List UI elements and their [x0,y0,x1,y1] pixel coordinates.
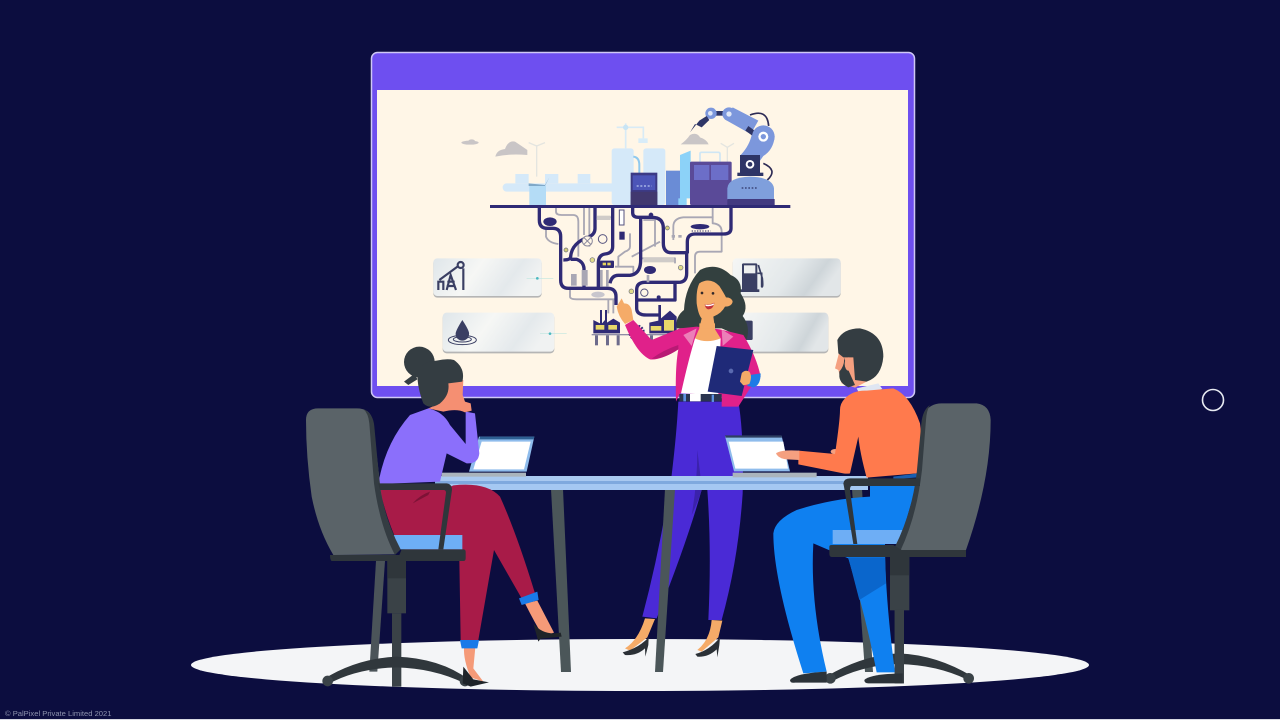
right laptop [725,435,817,477]
floor ellipse [191,639,1089,691]
dark machine [631,173,657,205]
chair seat [829,545,966,557]
eyes and mouth [701,292,714,309]
icon: barrel [740,321,753,340]
man on right with chair [773,328,991,684]
ear [845,357,853,371]
chair cushion [393,535,462,549]
jacket [625,320,761,407]
hand on tablet [740,371,751,385]
beard [839,357,855,387]
blue towers [666,171,680,205]
trouser fold [692,450,702,515]
trouser fold [413,492,430,503]
icon: oil pump [438,262,464,290]
chair column front [895,610,904,683]
trousers [642,402,743,620]
presentation screen [372,52,914,398]
second hand [831,449,839,454]
purple machine [700,152,720,162]
hair [837,328,883,382]
pointing hand [617,298,633,324]
trousers [773,485,917,673]
icon: oil drop [448,320,476,345]
belt [679,394,722,402]
screen content area [377,90,908,386]
chair back [306,408,398,555]
blue cuff [747,373,761,387]
conveyor [503,174,633,192]
trousers [380,485,535,640]
cursor circle [1202,390,1224,410]
sweater [798,388,921,478]
factory diagram [433,107,841,353]
info card: fuel pump [733,258,841,298]
box on conveyor [529,177,549,186]
lapels [683,328,697,346]
clouds [461,134,709,157]
armrest [378,483,452,549]
cuffs [460,592,539,648]
info card: oil pump [433,258,553,298]
icon: fuel pump [739,263,763,292]
shoes [790,672,903,683]
factories [592,305,678,345]
chair back leg and column [322,561,470,687]
presenter upper body [617,267,761,407]
info card: barrel [740,313,828,353]
left foot [623,618,655,657]
right shin and foot [463,647,489,687]
shirt [681,338,721,395]
chair seat [330,549,466,561]
hair [676,267,748,339]
sweater [378,408,479,484]
table [435,476,873,672]
face [835,352,867,388]
dark pipes [539,207,731,315]
hair [404,347,463,407]
presenter legs [623,402,743,657]
left laptop [442,437,534,477]
crane [617,123,648,148]
hand [776,450,799,460]
chair back [898,403,991,550]
collar [857,383,882,395]
woman on left with chair [306,347,562,687]
info card: oil drop [443,313,567,353]
face [697,281,733,328]
wind turbines [529,143,734,177]
chair cushion [833,530,903,544]
pale buildings [612,148,665,205]
jacket sleeve shade [652,345,678,359]
armrest [843,478,920,544]
neck [695,323,721,341]
pipe fittings [543,210,711,299]
left shin and foot [525,601,562,642]
shelf [490,205,790,208]
chair back edge [895,405,930,552]
grey pipes [546,207,722,313]
copyright text: © PalPixel Private Limited 2021 [5,709,111,718]
table legs [551,489,571,672]
chair back edge [363,409,401,555]
right foot [695,620,722,657]
chair base [825,557,974,684]
belt [893,473,917,479]
table top [435,476,868,481]
bottom edge line [0,719,1280,720]
head and hand [428,380,472,412]
trouser shade [848,557,886,600]
tablet [708,346,753,396]
robot arm [690,107,775,205]
